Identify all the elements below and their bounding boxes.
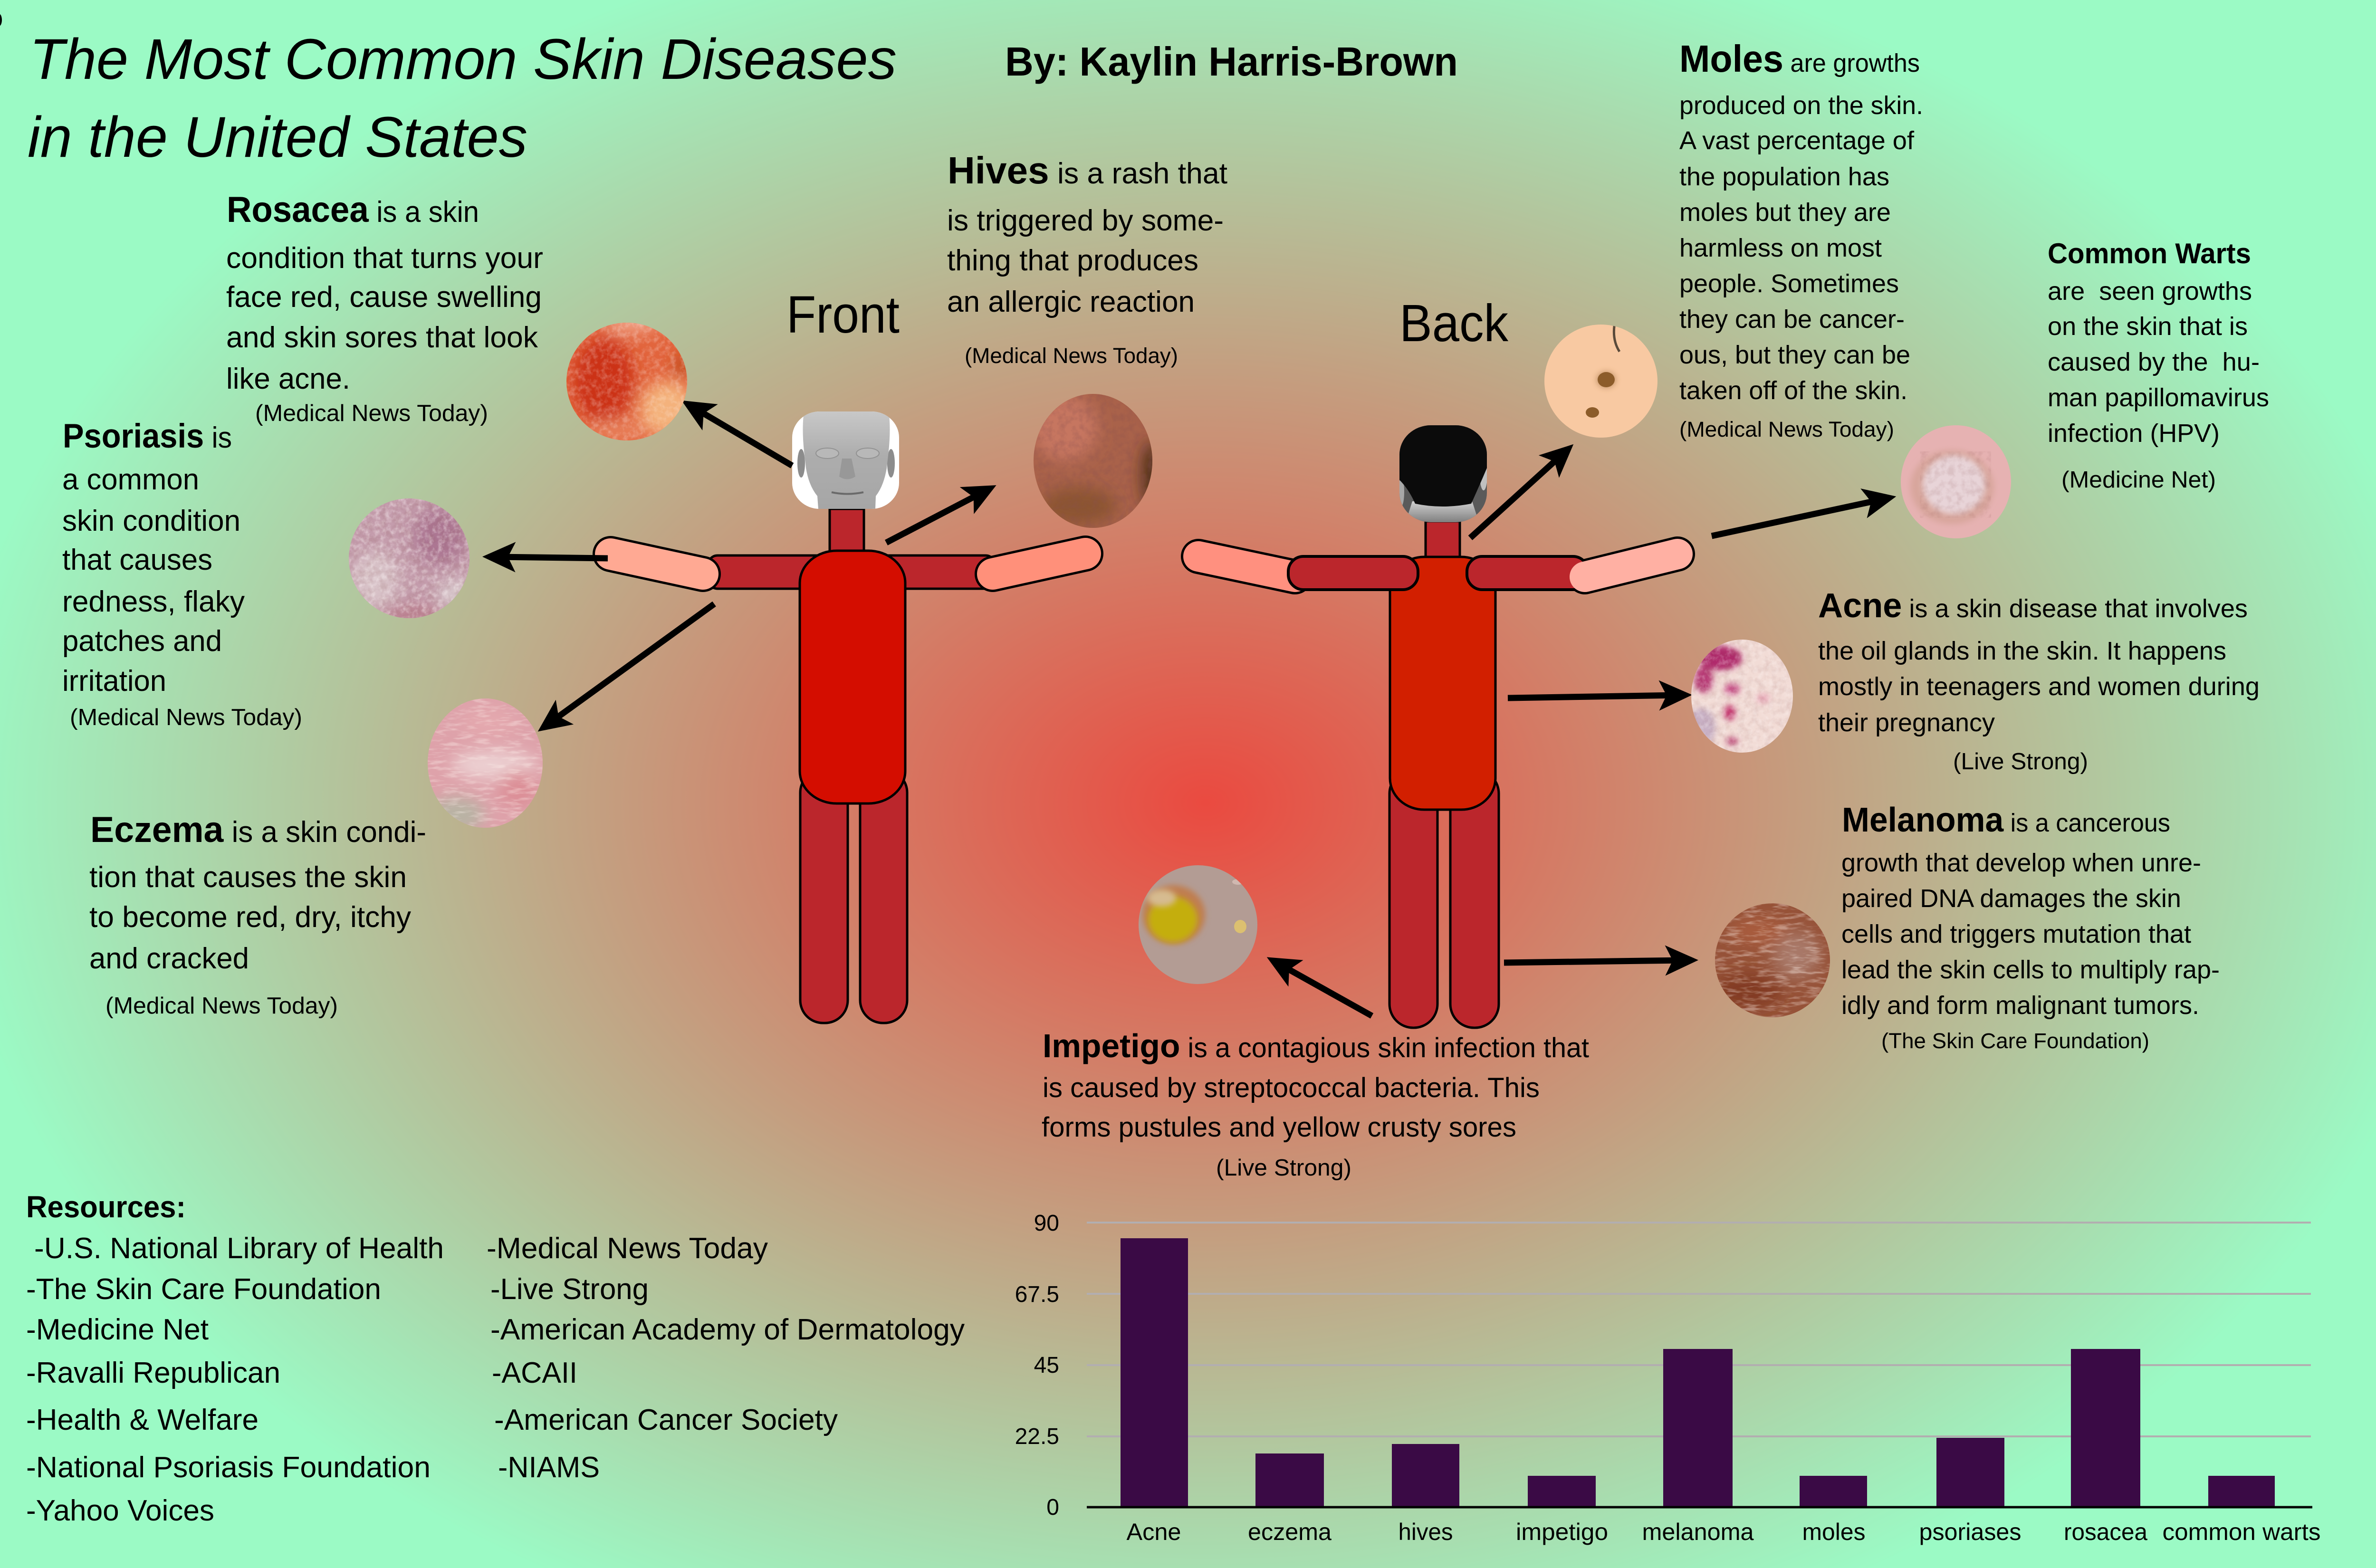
text block: moles: taken off of the skin.: [1679, 376, 1907, 405]
back torso: [1390, 557, 1495, 810]
text block: eczema: to become red, dry, itchy: [89, 900, 412, 934]
text block: moles: A vast percentage of: [1679, 126, 1915, 155]
text block: melanoma: paired DNA damages the skin: [1841, 884, 2181, 913]
text block: moles: produced on the skin.: [1679, 91, 1923, 120]
x axis labels: hives: [1398, 1519, 1453, 1545]
text block: psoriasis: Psoriasis is: [63, 418, 232, 455]
back left upper arm: [1288, 556, 1418, 590]
x axis labels: moles: [1802, 1519, 1866, 1545]
text block: common warts: caused by the hu-: [2048, 348, 2260, 376]
text block: hives: (Medical News Today): [965, 344, 1178, 368]
text block: common warts: [2048, 238, 2269, 493]
text block: impetigo: Impetigo is a contagious skin infection that: [1043, 1027, 1589, 1064]
text block: psoriasis: redness, flaky: [62, 585, 245, 618]
resources list: [26, 1190, 965, 1527]
text block: moles: people. Sometimes: [1679, 269, 1899, 298]
x axis labels: melanoma: [1642, 1519, 1754, 1545]
text block: psoriasis: patches and: [62, 624, 222, 658]
text block: melanoma: cells and triggers mutation that: [1841, 920, 2191, 948]
back neck: [1426, 521, 1460, 559]
text block: common warts: infection (HPV): [2048, 419, 2220, 448]
back right lower arm fill: [1585, 554, 1677, 577]
text block: melanoma: growth that develop when unre-: [1841, 849, 2201, 877]
arrow: melanoma: [1504, 960, 1684, 963]
x axis labels: Acne: [1126, 1519, 1181, 1545]
text block: hives: Hives is a rash that: [948, 149, 1227, 191]
text block: psoriasis: irritation: [62, 664, 166, 698]
text block: moles: harmless on most: [1679, 234, 1882, 262]
text block: common warts: are seen growths: [2048, 277, 2252, 306]
bars: [1121, 1238, 2275, 1507]
text block: hives: [947, 149, 1227, 368]
photo: melanoma: [1714, 902, 1831, 1018]
text block: psoriasis: skin condition: [62, 504, 240, 537]
photo: acne: [1687, 639, 1794, 754]
text block: melanoma: (The Skin Care Foundation): [1881, 1029, 2149, 1053]
photo: hives: [1031, 393, 1163, 529]
text block: eczema: Eczema is a skin condi-: [90, 810, 426, 850]
text block: hives: is triggered by some-: [947, 204, 1224, 237]
text block: acne: [1818, 587, 2260, 774]
x axis labels: [1126, 1519, 2321, 1545]
resources list: -Ravalli Republican: [26, 1357, 280, 1389]
title: The Most Common Skin Diseases: [29, 27, 897, 91]
resources list: -National Psoriasis Foundation: [26, 1451, 431, 1484]
text block: moles: Moles are growths: [1679, 38, 1920, 80]
resources list: -Health & Welfare: [26, 1404, 259, 1436]
text block: acne: mostly in teenagers and women during: [1818, 672, 2260, 701]
text block: acne: (Live Strong): [1953, 748, 2088, 774]
text block: melanoma: idly and form malignant tumors.: [1841, 991, 2199, 1020]
text block: rosacea: [226, 190, 543, 426]
text block: melanoma: Melanoma is a cancerous: [1842, 801, 2170, 839]
text block: rosacea: and skin sores that look: [226, 321, 538, 354]
arrow: moles: [1470, 454, 1563, 538]
x axis labels: impetigo: [1516, 1519, 1608, 1545]
text block: moles: (Medical News Today): [1679, 417, 1894, 441]
text block: acne: the oil glands in the skin. It happens: [1818, 637, 2226, 665]
resources list: -Medicine Net: [26, 1313, 209, 1346]
text block: eczema: and cracked: [89, 942, 249, 975]
resources list: -Medical News Today: [487, 1232, 768, 1265]
text block: moles: they can be cancer-: [1679, 305, 1905, 334]
text block: moles: ous, but they can be: [1679, 341, 1910, 369]
text block: common warts: man papillomavirus: [2048, 383, 2269, 412]
front head: [792, 411, 899, 509]
x axis labels: rosacea: [2064, 1519, 2147, 1545]
title: in the United States: [28, 105, 527, 169]
text block: acne: Acne is a skin disease that involves: [1818, 587, 2248, 625]
text block: hives: thing that produces: [947, 244, 1198, 277]
text block: eczema: (Medical News Today): [105, 993, 338, 1019]
text block: psoriasis: a common: [62, 463, 199, 496]
x axis labels: psoriases: [1919, 1519, 2022, 1545]
resources list: -U.S. National Library of Health: [34, 1232, 444, 1265]
resources list: -Live Strong: [490, 1273, 649, 1306]
torso: [800, 551, 905, 803]
text block: impetigo: [1042, 1027, 1589, 1181]
text block: impetigo: is caused by streptococcal bacteria. This: [1043, 1072, 1540, 1103]
text block: rosacea: condition that turns your: [226, 241, 543, 275]
text block: common warts: (Medicine Net): [2061, 467, 2216, 493]
y axis labels: 22.5: [1015, 1424, 1059, 1449]
text block: common warts: on the skin that is: [2048, 312, 2248, 341]
text block: melanoma: lead the skin cells to multiply rap-: [1841, 956, 2220, 984]
text block: eczema: tion that causes the skin: [89, 860, 407, 894]
x axis labels: common warts: [2162, 1519, 2321, 1545]
text block: psoriasis: (Medical News Today): [70, 704, 302, 730]
arrow: common warts: [1712, 499, 1882, 536]
resources list: -ACAII: [492, 1357, 577, 1389]
text block: rosacea: Rosacea is a skin: [227, 190, 479, 230]
text block: rosacea: face red, cause swelling: [226, 280, 542, 314]
neck: [830, 509, 864, 552]
text block: moles: [1679, 38, 1923, 441]
text block: acne: their pregnancy: [1818, 708, 1995, 737]
arrow: acne: [1508, 695, 1678, 698]
right lower arm: [993, 554, 1085, 574]
front figure: [611, 509, 1085, 1023]
y axis labels: 0: [1046, 1495, 1059, 1520]
text block: eczema: [89, 810, 426, 1019]
photo: eczema: [427, 698, 544, 833]
y axis labels: 67.5: [1015, 1282, 1059, 1307]
resources list: -American Cancer Society: [494, 1404, 838, 1436]
back left lower arm: [1198, 556, 1295, 577]
left lower arm: [611, 554, 703, 574]
text block: common warts: Common Warts: [2048, 238, 2251, 269]
arrow: psoriasis: [497, 557, 608, 558]
back right upper arm: [1467, 556, 1588, 590]
photo: impetigo: [1138, 864, 1258, 985]
arrow: eczema: [549, 604, 714, 723]
right leg: [860, 770, 907, 1023]
resources list: -Yahoo Voices: [26, 1494, 214, 1527]
photo: common warts: [1900, 424, 2012, 539]
arrow: impetigo: [1279, 964, 1372, 1016]
photo: psoriasis: [349, 498, 469, 618]
y axis labels: 45: [1034, 1353, 1059, 1378]
text block: rosacea: like acne.: [226, 362, 350, 395]
text block: impetigo: forms pustules and yellow crusty sores: [1042, 1112, 1516, 1143]
photo: moles: [1543, 323, 1658, 439]
left leg: [800, 770, 848, 1023]
text block: melanoma: [1841, 801, 2220, 1053]
back figure: [1198, 521, 1677, 1028]
text block: psoriasis: that causes: [62, 543, 212, 576]
text block: moles: moles but they are: [1679, 198, 1891, 227]
label: front: Front: [786, 286, 900, 344]
text block: moles: the population has: [1679, 163, 1889, 191]
back right lower arm: [1585, 554, 1677, 577]
back right leg: [1450, 770, 1499, 1028]
x axis labels: eczema: [1248, 1519, 1332, 1545]
bar chart: [1015, 1211, 2321, 1545]
arrow: rosacea: [694, 408, 792, 466]
arrow: hives: [886, 492, 984, 543]
text block: hives: an allergic reaction: [947, 285, 1195, 318]
y axis labels: 90: [1034, 1211, 1059, 1236]
back left leg: [1389, 770, 1437, 1028]
resources list: -The Skin Care Foundation: [26, 1273, 381, 1306]
text block: impetigo: (Live Strong): [1216, 1155, 1351, 1181]
y axis labels: [1015, 1211, 1059, 1520]
back head: [1399, 425, 1487, 522]
text block: rosacea: (Medical News Today): [255, 400, 488, 426]
text block: psoriasis: [62, 418, 302, 730]
resources list: -American Academy of Dermatology: [490, 1313, 965, 1346]
upper arms: [708, 555, 995, 589]
label: back: Back: [1399, 294, 1509, 353]
title: [28, 27, 897, 169]
resources list: Resources:: [26, 1190, 186, 1224]
photo: rosacea: [566, 323, 687, 440]
author byline: By: Kaylin Harris-Brown: [1005, 39, 1458, 85]
resources list: -NIAMS: [498, 1451, 600, 1484]
